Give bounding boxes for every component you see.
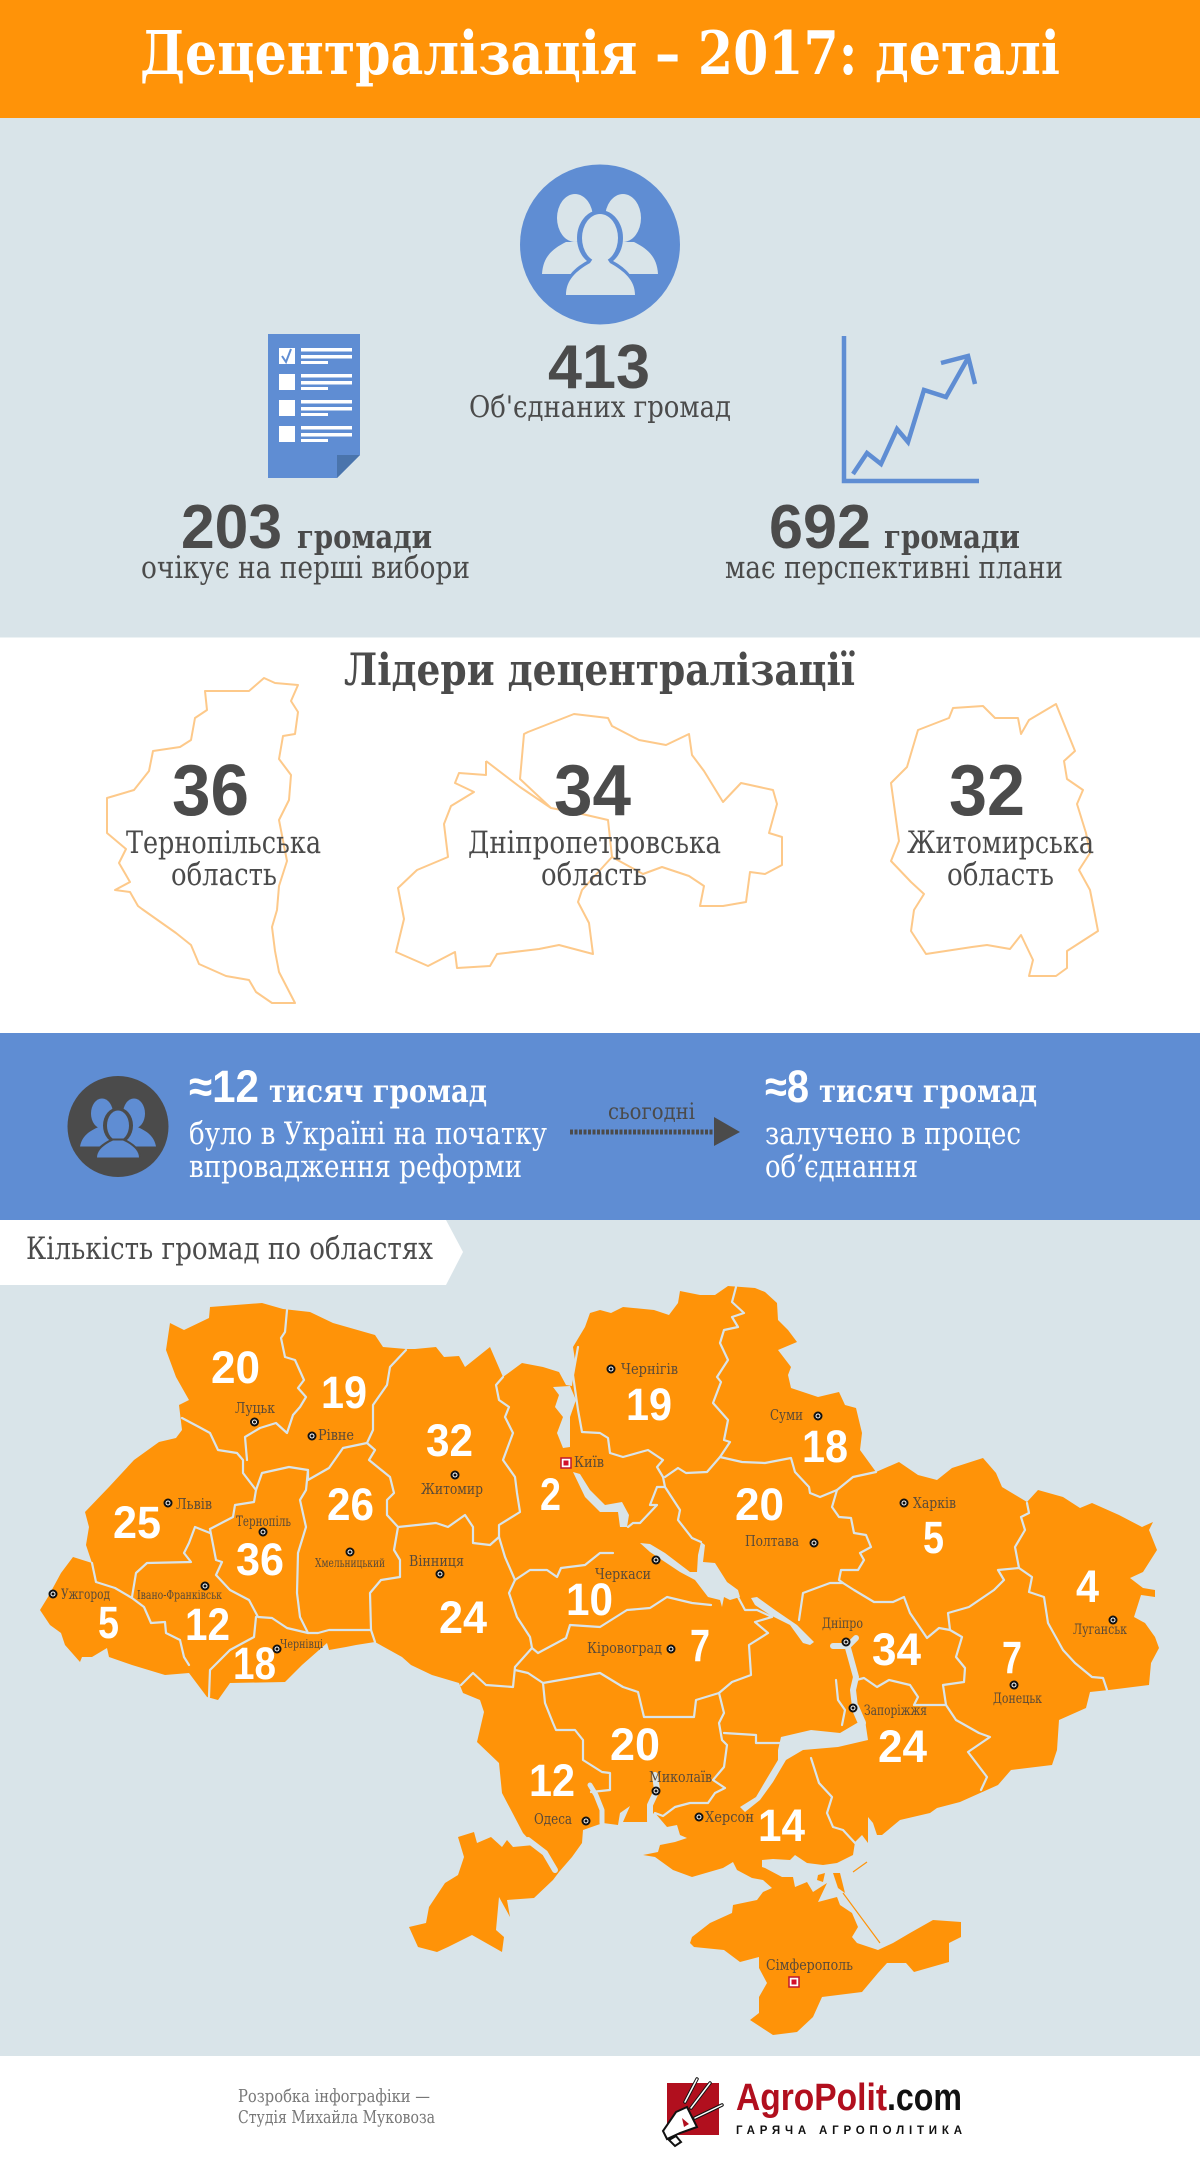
- panel: blue band reform: [0, 1033, 1200, 1220]
- stat: 692: громади: [884, 517, 1020, 556]
- city labels: Сімферополь: [766, 1956, 853, 1974]
- text: 12 thousand: було в Україні на початку: [189, 1116, 547, 1152]
- leader: Ternopil: Тернопільська: [126, 825, 321, 861]
- Sivash islands and spits: [817, 1862, 880, 1943]
- map tag heading: Кількість громад по областях: [26, 1231, 433, 1267]
- icon: people circle: [520, 164, 680, 324]
- city labels: Вінниця: [409, 1552, 464, 1570]
- water bodies: [553, 1386, 868, 1812]
- leader: Zhytomyr: Житомирська: [907, 825, 1094, 861]
- leader: Dnipropetrovsk: Дніпропетровська: [468, 825, 721, 861]
- leader: Dnipropetrovsk: 34: [554, 751, 631, 831]
- stat: 203: 203: [181, 493, 282, 562]
- logo: AgroPolit: .com: [887, 2077, 962, 2119]
- stat: 692: 692: [769, 493, 871, 562]
- oblast numbers: 19: [626, 1379, 672, 1430]
- city labels: Одеса: [534, 1810, 572, 1828]
- Crimea: [690, 1867, 961, 2035]
- stat: 203: громади: [297, 517, 432, 556]
- city labels: Чернівці: [280, 1636, 323, 1651]
- city labels: Івано-Франківськ: [137, 1588, 222, 1602]
- title: Децентралізація – 2017: деталі: [140, 19, 1060, 89]
- oblast numbers: 26: [327, 1479, 374, 1530]
- panel: leaders: [107, 645, 1098, 1003]
- city labels: Тернопіль: [236, 1514, 291, 1530]
- text: 8 thousand: ≈8: [765, 1061, 809, 1112]
- oblast numbers: 5: [98, 1597, 119, 1648]
- oblast numbers: 25: [113, 1497, 161, 1548]
- oblast numbers: 18: [802, 1421, 848, 1472]
- city labels: Дніпро: [822, 1616, 863, 1632]
- city markers: [50, 1366, 1116, 1987]
- text: 12 thousand: впровадження реформи: [189, 1149, 522, 1185]
- oblast borders: [92, 1287, 1107, 1843]
- oblast numbers: 32: [426, 1415, 473, 1466]
- map tag heading: [0, 1220, 463, 1285]
- header banner: [0, 0, 1200, 118]
- oblast numbers: 20: [735, 1479, 784, 1530]
- oblast numbers: 36: [236, 1534, 284, 1585]
- city labels: Харків: [913, 1494, 956, 1512]
- city labels: Чернігів: [621, 1360, 678, 1378]
- leader: Zhytomyr: 32: [949, 751, 1025, 831]
- city labels: Кіровоград: [587, 1639, 662, 1657]
- map: Ukraine: [40, 1286, 1159, 2035]
- leader: Zhytomyr: область: [947, 857, 1054, 893]
- panel: key statistics: [0, 118, 1200, 638]
- rivers: [528, 1638, 862, 1870]
- stat: 692: має перспективні плани: [725, 550, 1063, 586]
- oblast numbers: 12: [185, 1599, 230, 1650]
- oblast numbers: 12: [529, 1755, 575, 1806]
- oblast numbers: 34: [872, 1624, 921, 1675]
- text: 8 thousand: об’єднання: [765, 1149, 918, 1185]
- city labels: Черкаси: [595, 1565, 651, 1583]
- text: 8 thousand: тисяч громад: [819, 1072, 1037, 1110]
- stat: 413: [469, 333, 731, 425]
- city labels: Житомир: [421, 1480, 483, 1498]
- text: 12 thousand: ≈12: [189, 1061, 259, 1112]
- text: 8 thousand: залучено в процес: [765, 1116, 1021, 1152]
- oblast numbers: 7: [690, 1620, 710, 1671]
- logo: AgroPolit: [663, 2077, 962, 2146]
- panel: map background: [0, 1220, 1200, 2056]
- city labels: Рівне: [318, 1426, 354, 1444]
- tagline: ГАРЯЧА АГРОПОЛІТИКА: [736, 2125, 962, 2137]
- stat: 203: [141, 493, 470, 586]
- text: 12 thousand: [189, 1061, 547, 1185]
- leader: Ternopil: [107, 678, 321, 1003]
- leader: Ternopil: область: [171, 857, 277, 893]
- icon: ballot document: [268, 334, 360, 478]
- footer credit: Розробка інфографіки —: [238, 2086, 430, 2107]
- leader: Dnipropetrovsk: [396, 714, 782, 968]
- text: 12 thousand: тисяч громад: [269, 1072, 487, 1110]
- arrow: today: сьогодні: [608, 1100, 695, 1125]
- leader: Dnipropetrovsk: область: [541, 857, 647, 893]
- city labels: Суми: [770, 1406, 803, 1424]
- oblast numbers: 19: [321, 1367, 367, 1418]
- city labels: Львів: [176, 1495, 212, 1513]
- oblast numbers: 5: [923, 1512, 944, 1563]
- city labels: Донецьк: [993, 1691, 1042, 1707]
- text: 8 thousand: [765, 1061, 1037, 1185]
- icon: megaphone and wheat: [663, 2079, 722, 2146]
- stat: 203: очікує на перші вибори: [141, 550, 470, 586]
- icon: rising chart: [844, 336, 979, 481]
- leader: Ternopil: 36: [172, 751, 249, 831]
- wordmark: AgroPolit: [736, 2077, 887, 2119]
- leader: Zhytomyr: [891, 704, 1098, 976]
- footer credit: [238, 2086, 435, 2128]
- oblast numbers: [98, 1342, 1099, 1851]
- city labels: Луцьк: [235, 1399, 276, 1417]
- oblast numbers: 10: [566, 1574, 613, 1625]
- oblast numbers: 4: [1076, 1561, 1099, 1612]
- city labels: [61, 1360, 1127, 1974]
- city labels: Полтава: [745, 1532, 799, 1550]
- footer credit: Студія Михайла Муковоза: [238, 2107, 435, 2128]
- oblast numbers: 20: [211, 1342, 260, 1393]
- country shape: [40, 1286, 1159, 1952]
- city labels: Миколаїв: [649, 1768, 712, 1786]
- oblast numbers: 20: [610, 1719, 660, 1770]
- oblast numbers: 24: [439, 1592, 487, 1643]
- city labels: Хмельницький: [315, 1555, 385, 1570]
- heading: leaders: Лідери децентралізації: [344, 645, 855, 696]
- city labels: Київ: [574, 1453, 604, 1471]
- arrow: today: [570, 1100, 740, 1146]
- oblast numbers: 18: [233, 1638, 276, 1689]
- oblast numbers: 7: [1002, 1632, 1022, 1683]
- stat: 692: [725, 493, 1063, 586]
- oblast numbers: 24: [878, 1721, 927, 1772]
- city labels: Херсон: [705, 1808, 754, 1826]
- stat: 413: 413: [548, 333, 650, 402]
- city labels: Запоріжжя: [864, 1703, 927, 1719]
- icon: people dark circle: [68, 1076, 168, 1177]
- oblast numbers: 2: [540, 1469, 561, 1520]
- city labels: Ужгород: [61, 1587, 110, 1603]
- city labels: Луганськ: [1073, 1622, 1127, 1638]
- stat: 413: Об'єднаних громад: [469, 390, 731, 425]
- oblast numbers: 14: [758, 1800, 805, 1851]
